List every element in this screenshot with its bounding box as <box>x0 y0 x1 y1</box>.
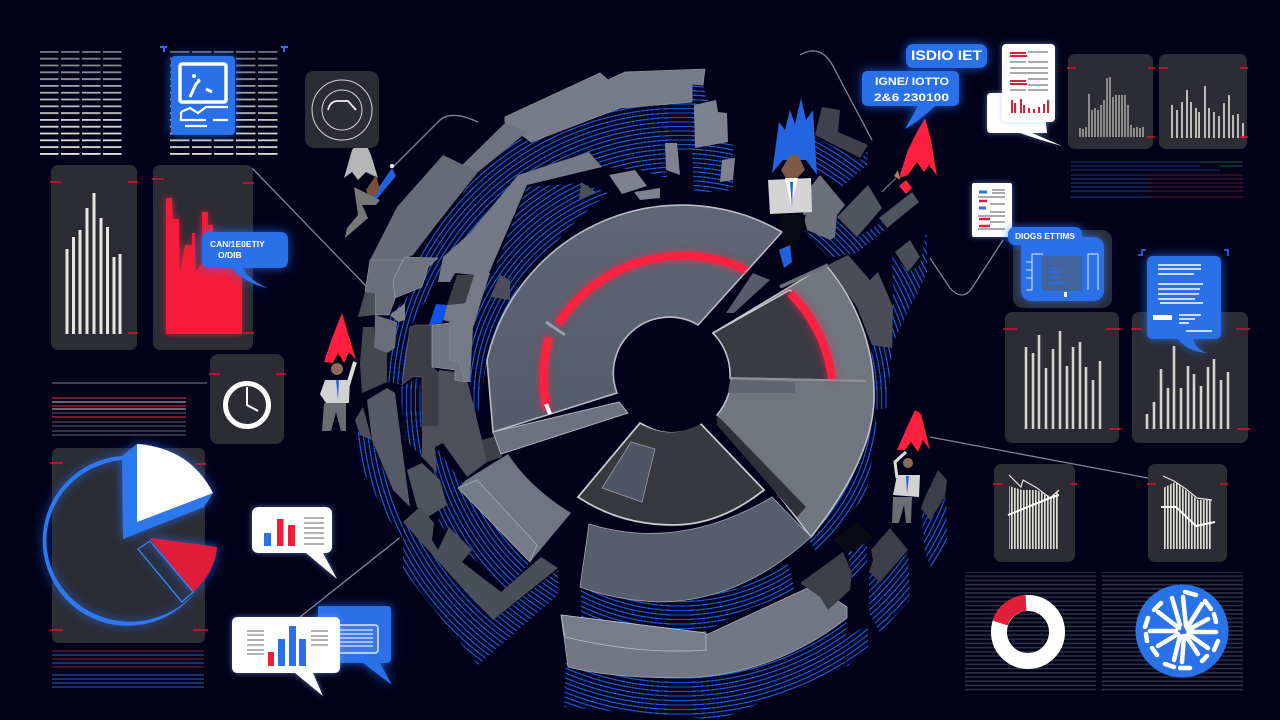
pie ring <box>43 456 197 626</box>
panel: pie chart <box>43 444 217 643</box>
callout: DIOGS label: DIOGS ETTIMS <box>1015 232 1076 241</box>
panel: line chart 1 <box>993 464 1077 562</box>
gap fragment <box>726 273 770 313</box>
centre hole <box>618 324 726 432</box>
figure: red-haired person right <box>892 410 930 523</box>
callout: ISDIO IET label <box>906 44 987 68</box>
panel: right bar chart 2 <box>1131 312 1250 443</box>
dark right inset wedge <box>713 290 834 380</box>
figure: red-haired person top right <box>882 118 937 194</box>
main right wedge <box>713 265 874 537</box>
panel: top right chart 1 <box>1067 54 1155 149</box>
document: report sheet <box>1002 44 1055 122</box>
callout: red chart bubble: CAN/1E0ETIY <box>210 239 265 249</box>
second ring segment <box>438 152 602 282</box>
callout: red chart bubble: O/DIB <box>218 250 242 260</box>
panel: top right chart 2 <box>1159 54 1248 149</box>
panel: right bar chart 1 <box>1003 312 1121 443</box>
right wedge shadow edge <box>717 415 806 517</box>
lower left block inset <box>458 480 537 562</box>
outer ring segment <box>460 123 527 172</box>
left tower blocks <box>402 273 510 477</box>
right wedge needle <box>730 378 866 381</box>
progress arc end cap <box>546 404 550 414</box>
lower left dark cluster <box>403 507 558 620</box>
bottom wedge inset panel <box>602 442 655 502</box>
panel: white bar chart <box>50 165 138 350</box>
corner marks <box>160 47 288 52</box>
pie slice red <box>150 538 217 592</box>
callout: red chart bubble <box>202 232 288 288</box>
lined grid left <box>40 51 124 155</box>
panel: clock <box>209 354 286 444</box>
bottom right dark fragments <box>800 470 947 610</box>
callout: ISDIO IET label: ISDIO IET <box>911 47 982 63</box>
panel: donut chart <box>965 572 1096 692</box>
pie slice outline <box>138 541 193 602</box>
bottom segment <box>580 497 811 602</box>
callout: blue document bubble <box>318 606 392 685</box>
floating top fragments <box>579 100 735 200</box>
central radial diagram <box>355 69 947 720</box>
lined grid with blue tile <box>160 47 288 155</box>
callout: DIOGS label <box>1008 227 1082 245</box>
callout: IGNE bubble <box>862 71 959 129</box>
blue accent block <box>429 304 447 325</box>
figure: red-haired person left <box>320 313 356 431</box>
stripes above pie <box>52 383 207 435</box>
panel: ring icon <box>305 71 379 148</box>
panel: red bar chart <box>152 165 254 350</box>
figure: blue-haired person <box>768 98 817 268</box>
left big ring segment <box>370 155 478 280</box>
blue icon tile <box>171 56 235 135</box>
stripes below pie <box>52 651 204 687</box>
left lower strip <box>493 402 628 454</box>
blue screen tile <box>1013 230 1112 308</box>
callout: IGNE bubble: 2&6 230100 <box>874 92 949 104</box>
panel: blue radial dial <box>1102 572 1243 692</box>
bottom dark wedge <box>578 423 764 525</box>
callout: large white chart bubble <box>232 617 340 696</box>
document: small sheet <box>972 183 1012 237</box>
progress arc marker <box>546 322 565 335</box>
callout: back white document bubble <box>987 93 1062 146</box>
outer bottom ring <box>561 585 847 678</box>
callout: small white chart bubble <box>252 507 337 579</box>
corner marks <box>1138 250 1228 256</box>
outer bottom ring inset <box>561 615 706 651</box>
main top wedge <box>487 205 782 432</box>
connector lines <box>252 51 1148 617</box>
lower left block <box>458 454 571 562</box>
callout: blue document bubble right <box>1147 256 1221 353</box>
pie slice side <box>122 444 213 539</box>
outer top ring <box>505 69 705 142</box>
left ring fragments <box>355 257 447 517</box>
dark needle on gap <box>780 265 828 287</box>
pie slice white <box>137 444 213 522</box>
red progress arc <box>543 256 832 410</box>
right dark block cluster <box>800 107 920 348</box>
stripes under top right charts <box>1071 162 1243 197</box>
figure: gray-haired person with blue device <box>344 137 396 238</box>
blue stacked layers <box>355 84 947 720</box>
callout: IGNE bubble: IGNE/ IOTTO <box>875 76 949 88</box>
inset wedge lower strip <box>728 380 795 393</box>
panel: line chart 2 <box>1147 464 1228 562</box>
